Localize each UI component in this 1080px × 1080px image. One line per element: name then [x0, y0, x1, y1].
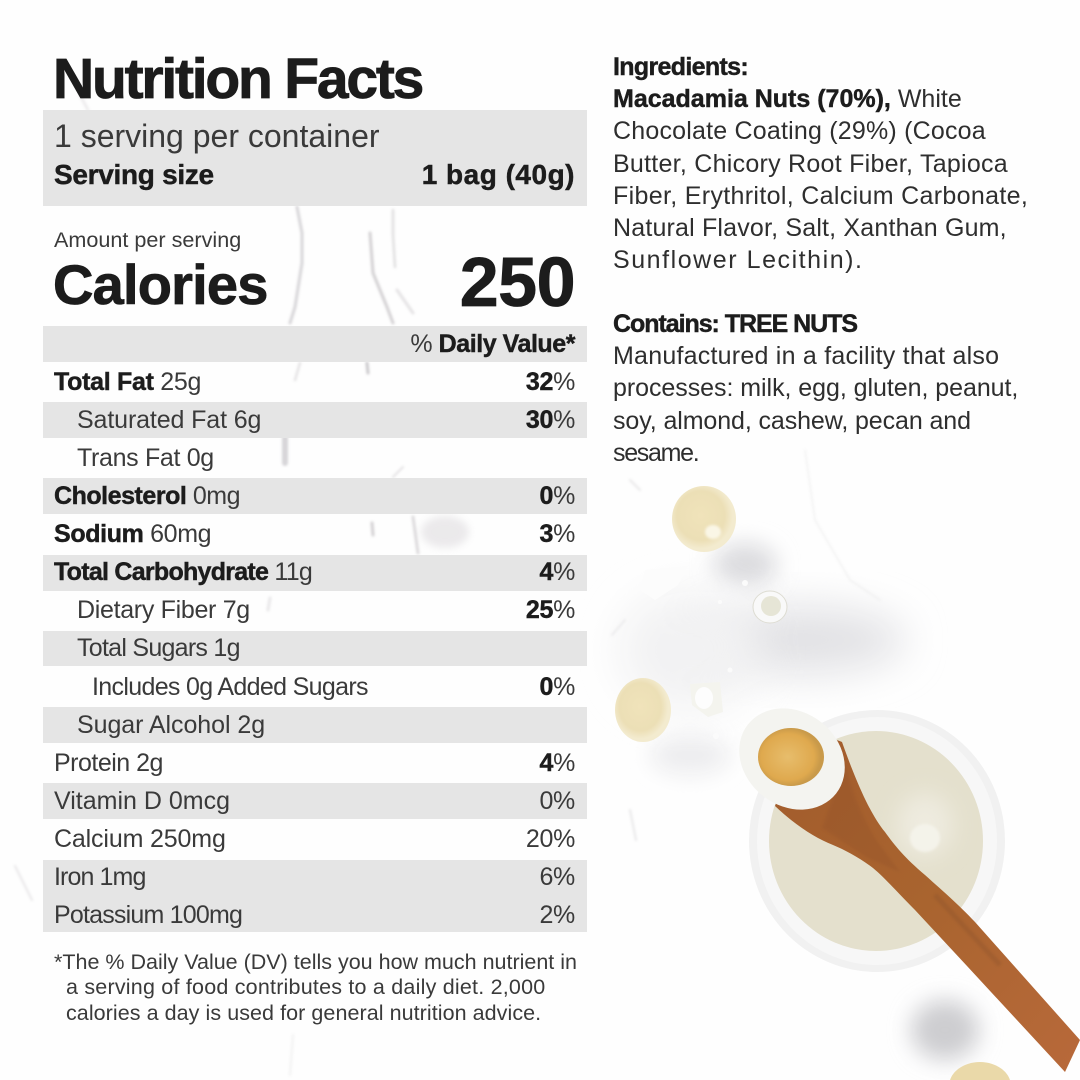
added sugars: [92, 673, 575, 701]
allergen text: Contains: TREE NUTS: [613, 310, 857, 338]
footnote: [54, 950, 577, 1025]
total fat: Total Fat 25g: [54, 368, 201, 396]
calcium: 20%: [526, 825, 575, 853]
total carbohydrate: 4%: [539, 558, 575, 586]
protein: [54, 749, 575, 777]
ingredients text: [613, 53, 1028, 274]
iron: [54, 863, 575, 891]
cholesterol: [54, 482, 575, 510]
footnote: a serving of food contributes to a daily diet. 2,000: [66, 975, 545, 999]
icon: crumbs: [640, 566, 748, 739]
icon: bottom nut: [949, 1062, 1011, 1080]
servings per container: 1 serving per container: [54, 118, 380, 154]
ingredients text: Sunflower Lecithin).: [613, 246, 864, 274]
sugar alcohol: Sugar Alcohol 2g: [77, 711, 265, 739]
icon: small white chip: [753, 591, 787, 623]
saturated fat: [77, 406, 575, 434]
protein: 4%: [539, 749, 575, 777]
dietary fiber: 25%: [526, 596, 575, 624]
calories label: Calories: [53, 253, 268, 316]
dietary fiber: [77, 596, 575, 624]
total fat: [54, 368, 575, 396]
added sugars: 0%: [539, 673, 575, 701]
cholesterol: 0%: [539, 482, 575, 510]
ingredients text: Fiber, Erythritol, Calcium Carbonate,: [613, 182, 1028, 210]
trans fat: Trans Fat 0g: [77, 444, 214, 472]
icon: macadamia nut left: [615, 678, 671, 742]
sodium: Sodium 60mg: [54, 520, 211, 548]
total sugars: Total Sugars 1g: [77, 634, 240, 662]
icon: bowl of white chocolate: [749, 710, 1005, 972]
serving size: 1 bag (40g): [422, 159, 575, 190]
calories value: 250: [460, 243, 575, 321]
added sugars: Includes 0g Added Sugars: [92, 673, 368, 701]
allergen text: Manufactured in a facility that also: [613, 342, 999, 370]
saturated fat: Saturated Fat 6g: [77, 406, 261, 434]
iron: Iron 1mg: [54, 863, 145, 891]
serving size: Serving size: [54, 159, 214, 190]
iron: 6%: [539, 863, 575, 891]
soft shadows on marble: [620, 543, 979, 1060]
icon: wooden spoon: [775, 740, 1080, 1072]
footnote: *The % Daily Value (DV) tells you how much nutrient in: [54, 950, 577, 974]
daily value header: % Daily Value*: [410, 330, 575, 358]
sodium: [54, 520, 575, 548]
protein: Protein 2g: [54, 749, 163, 777]
allergen text: [613, 310, 1018, 467]
vitamin d: Vitamin D 0mcg: [54, 787, 230, 815]
potassium: Potassium 100mg: [54, 901, 242, 929]
calcium: [54, 825, 575, 853]
potassium: [54, 901, 575, 929]
vitamin d: [54, 787, 575, 815]
ingredients text: Butter, Chicory Root Fiber, Tapioca: [613, 150, 1008, 178]
icon: coated nut on spoon: [719, 687, 865, 831]
icon: macadamia nut top: [672, 486, 736, 552]
dietary fiber: Dietary Fiber 7g: [77, 596, 250, 624]
allergen text: sesame.: [613, 439, 698, 467]
sodium: 3%: [539, 520, 575, 548]
ingredients text: Macadamia Nuts (70%), White: [613, 85, 962, 113]
nutrient table: [43, 326, 587, 932]
potassium: 2%: [539, 901, 575, 929]
vitamin d: 0%: [539, 787, 575, 815]
saturated fat: 30%: [526, 406, 575, 434]
ingredients text: Chocolate Coating (29%) (Cocoa: [613, 117, 986, 145]
serving size: [54, 159, 575, 190]
ingredients text: Ingredients:: [613, 53, 748, 81]
total carbohydrate: Total Carbohydrate 11g: [54, 558, 312, 586]
allergen text: soy, almond, cashew, pecan and: [613, 407, 971, 435]
cholesterol: Cholesterol 0mg: [54, 482, 240, 510]
amount per serving: Amount per serving: [54, 227, 241, 252]
title: Nutrition Facts: [53, 47, 422, 111]
ingredients text: Natural Flavor, Salt, Xanthan Gum,: [613, 214, 1007, 242]
serving panel: [43, 110, 587, 206]
total carbohydrate: [54, 558, 575, 586]
footnote: calories a day is used for general nutrition advice.: [66, 1001, 541, 1025]
allergen text: processes: milk, egg, gluten, peanut,: [613, 374, 1018, 402]
total fat: 32%: [526, 368, 575, 396]
calcium: Calcium 250mg: [54, 825, 226, 853]
